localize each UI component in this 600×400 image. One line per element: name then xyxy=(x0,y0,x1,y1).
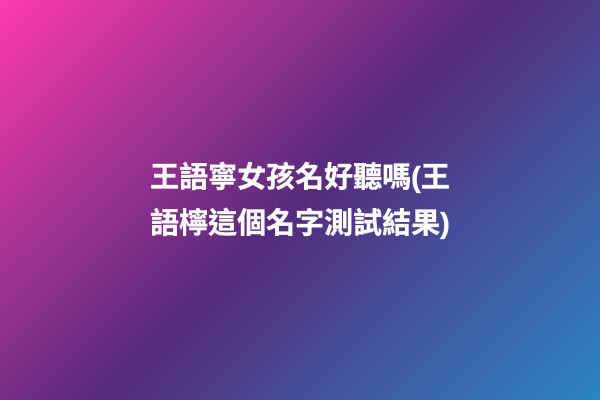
title: 語檸這個名字測試結果) xyxy=(150,208,450,240)
title: 王語寧女孩名好聽嗎(王 xyxy=(150,162,450,194)
title xyxy=(150,162,450,240)
